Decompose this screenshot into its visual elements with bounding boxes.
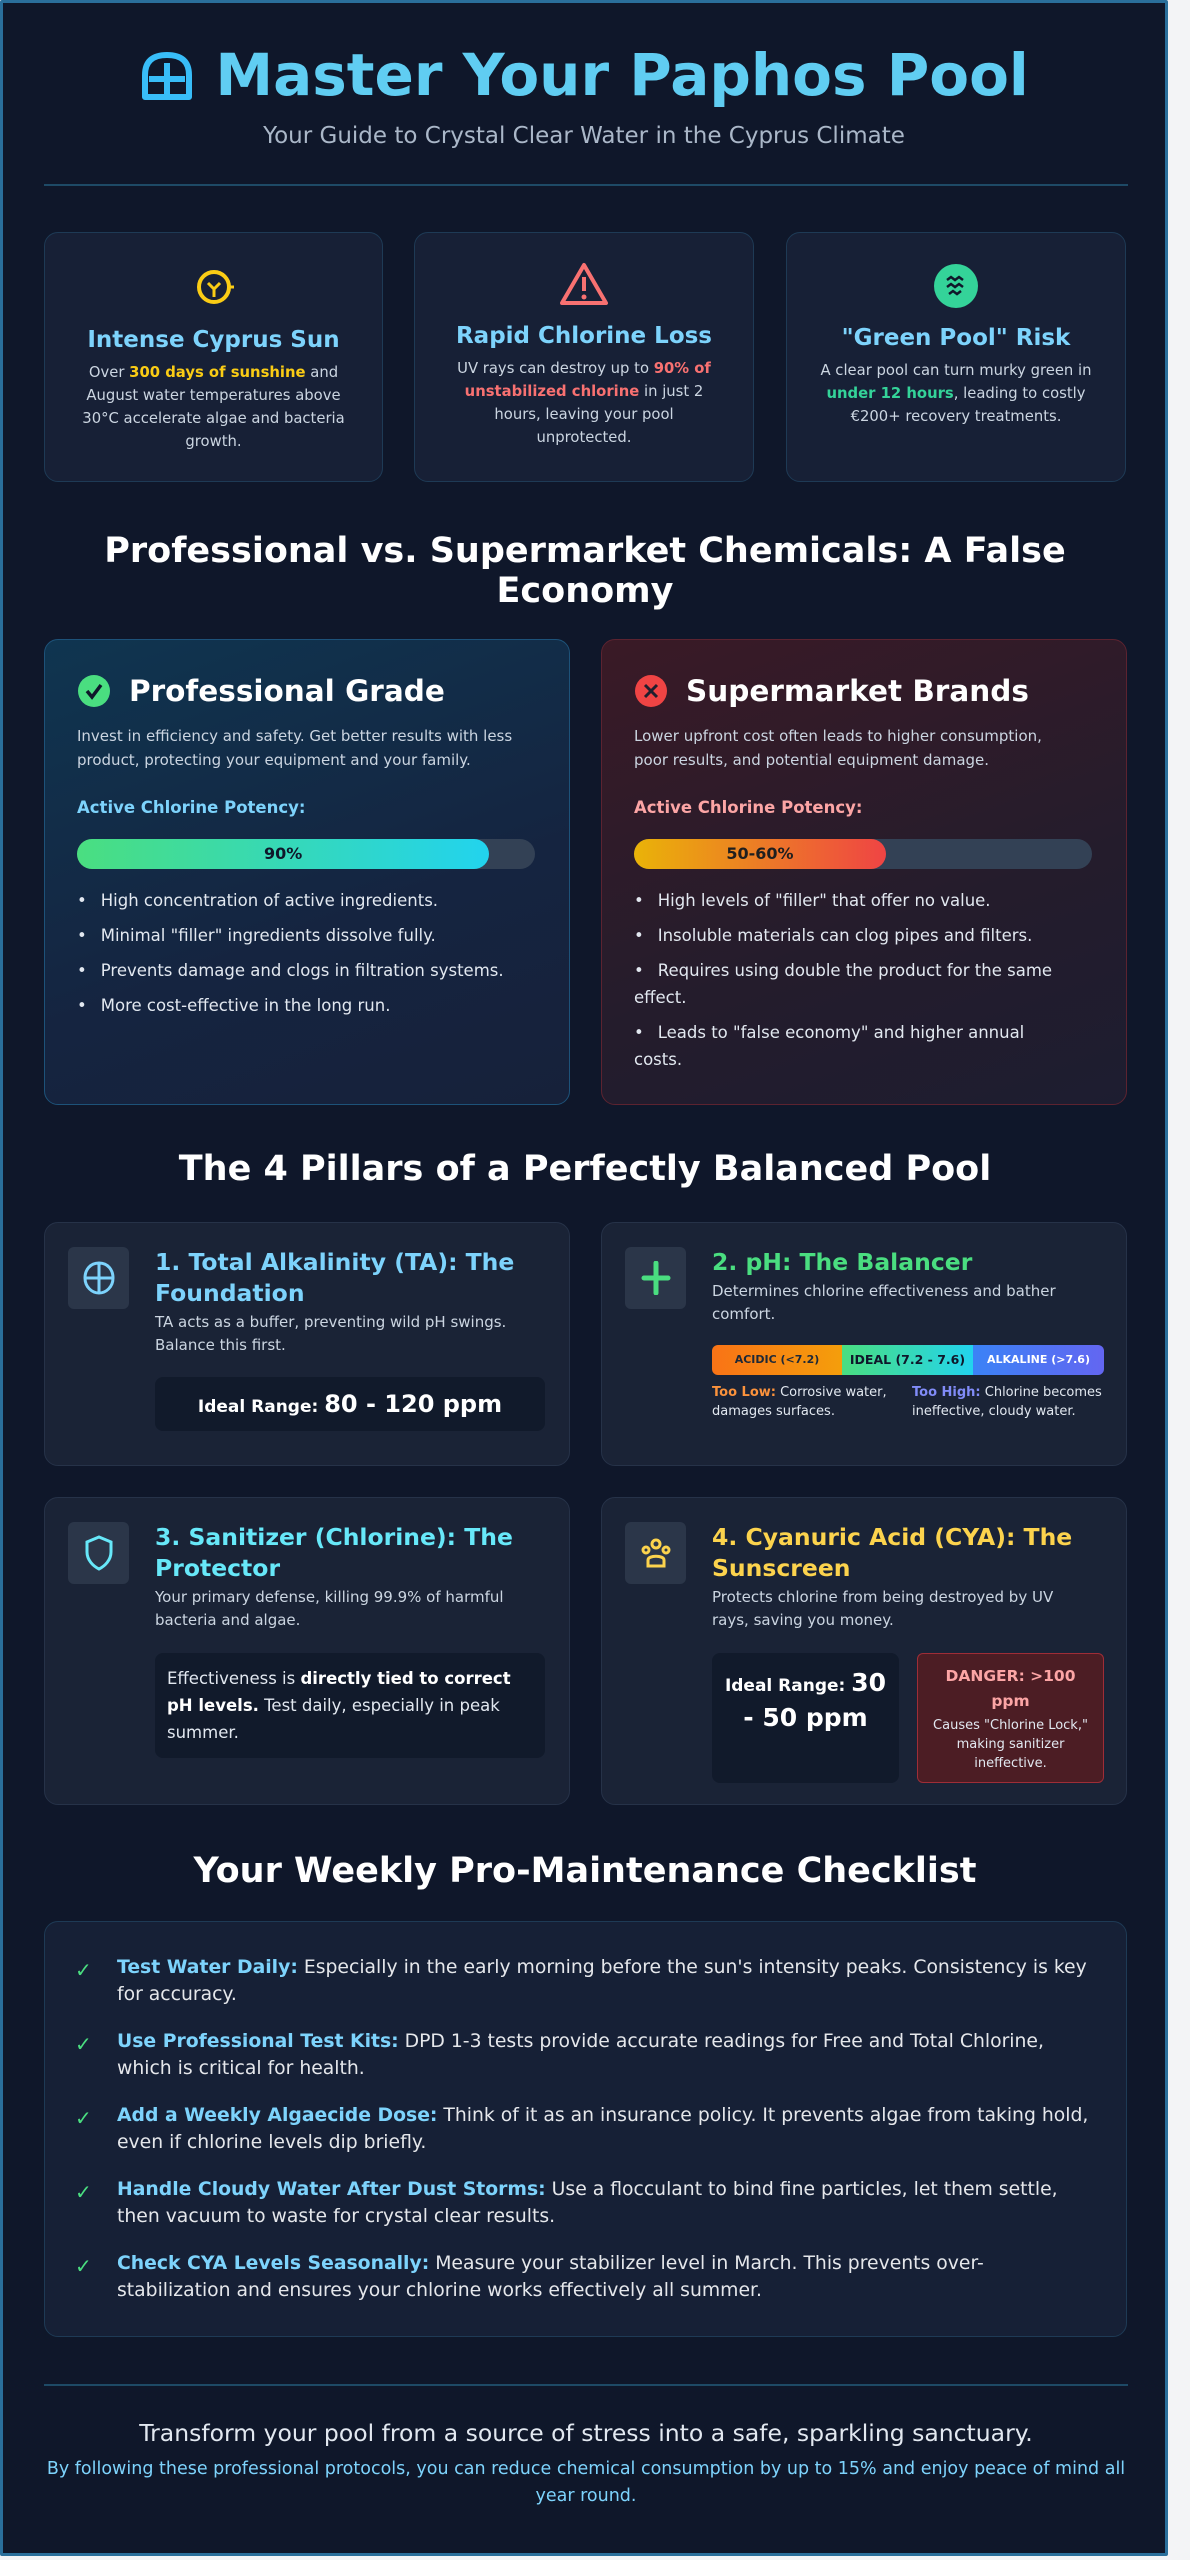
panel: ph: 2. pH: The Balancer: [712, 1248, 972, 1276]
item 3: Add a Weekly Algaecide Dose: Think of it as an insurance policy. It prevents algae from taking hold, even if chlorine levels dip briefly.: [117, 2105, 1088, 2153]
bar: 90%: 90%: [264, 844, 302, 863]
heading: supermarket brands: Supermarket Brands: [686, 674, 1029, 708]
panel: supermarket brands: Lower upfront cost often leads to higher consumption, poor results, and potential equipment damage.: [634, 727, 1042, 769]
heading: professional vs supermarket: Professional vs. Supermarket Chemicals: A False Economy: [104, 531, 1066, 611]
subtitle: Your Guide to Crystal Clear Water in the Cyprus Climate: [263, 123, 905, 149]
panel: ph: [601, 1222, 1127, 1466]
bar: 90%: [77, 839, 535, 869]
panel: cya: Protects chlorine from being destroyed by UV rays, saving you money.: [712, 1588, 1053, 1629]
panel: supermarket brands: Requires using double the product for the same effect.: [634, 961, 1052, 1007]
callout: danger: [917, 1653, 1104, 1783]
footer: tagline: Transform your pool from a source of stress into a safe, sparkling sanctuary.: [139, 2419, 1033, 2447]
callout: danger: Causes "Chlorine Lock," making sanitizer ineffective.: [933, 1718, 1088, 1771]
chart: ph scale: ALKALINE (>7.6): [987, 1353, 1090, 1366]
panel: checklist: [44, 1921, 1127, 2337]
icon: water: [934, 264, 978, 308]
panel: total alkalinity: 1. Total Alkalinity (TA): The Foundation: [155, 1248, 514, 1307]
title: Master Your Paphos Pool: [215, 41, 1029, 109]
callout: effectiveness: Effectiveness is directly tied to correct pH levels. Test daily, especially in peak summer.: [167, 1669, 511, 1742]
panel: supermarket brands: High levels of "filler" that offer no value.: [658, 891, 991, 910]
panel: sanitizer: [44, 1497, 570, 1805]
callout: danger: DANGER: >100 ppm: [945, 1667, 1076, 1710]
panel: professional grade: High concentration of active ingredients.: [101, 891, 438, 910]
icon: ta: [68, 1247, 129, 1309]
footer: note: By following these professional protocols, you can reduce chemical consumption by up to 15% and enjoy peace of mind all year round.: [47, 2459, 1125, 2506]
panel: green pool risk: [786, 232, 1126, 482]
item 1: ✓: [75, 1958, 92, 1982]
panel: professional grade: Invest in efficiency and safety. Get better results with less product, protecting your equipment and your family.: [77, 727, 512, 769]
item 5: ✓: [75, 2254, 92, 2278]
panel: supermarket brands: Insoluble materials can clog pipes and filters.: [658, 926, 1032, 945]
panel: professional grade: More cost-effective in the long run.: [101, 996, 390, 1015]
panel: supermarket brands: Leads to "false economy" and higher annual costs.: [634, 1023, 1024, 1069]
callout: effectiveness: [155, 1653, 545, 1758]
item 2: Use Professional Test Kits: DPD 1-3 tests provide accurate readings for Free and Total Chlorine, which is critical for health.: [117, 2031, 1044, 2079]
panel: rapid chlorine loss: [414, 232, 754, 482]
panel: supermarket brands: [601, 639, 1127, 1105]
item 3: ✓: [75, 2106, 92, 2130]
panel: green pool risk: A clear pool can turn murky green in under 12 hours, leading to costly €200+ recovery treatments.: [820, 362, 1092, 425]
icon: sunscreen: [625, 1522, 686, 1584]
item 5: Check CYA Levels Seasonally: Measure your stabilizer level in March. This prevents over-stabilization and ensures your chlorine works effectively all summer.: [117, 2253, 984, 2301]
panel: intense cyprus sun: Intense Cyprus Sun: [87, 327, 340, 353]
chart: ph scale: ACIDIC (<7.2): [735, 1353, 819, 1366]
panel: total alkalinity: TA acts as a buffer, preventing wild pH swings. Balance this first.: [155, 1313, 506, 1354]
panel: professional grade: Active Chlorine Potency:: [77, 798, 306, 817]
bar: 50-60%: 50-60%: [726, 844, 794, 863]
bar: 50-60%: [634, 839, 1092, 869]
panel: cya: 4. Cyanuric Acid (CYA): The Sunscreen: [712, 1523, 1072, 1582]
callout: ideal range ta: Ideal Range: 80 - 120 ppm: [198, 1390, 502, 1418]
panel: sanitizer: 3. Sanitizer (Chlorine): The Protector: [155, 1523, 513, 1582]
heading: professional grade: Professional Grade: [129, 674, 445, 708]
panel: professional grade: Prevents damage and clogs in filtration systems.: [101, 961, 504, 980]
panel: rapid chlorine loss: UV rays can destroy up to 90% of unstabilized chlorine in just 2 hours, leaving your pool unprotected.: [457, 360, 711, 446]
panel: intense cyprus sun: [44, 232, 383, 482]
panel: sanitizer: Your primary defense, killing 99.9% of harmful bacteria and algae.: [155, 1588, 504, 1629]
panel: ph: Too Low: Corrosive water, damages surfaces.: [712, 1385, 887, 1419]
chart: ph scale: [712, 1345, 1104, 1375]
chart: ph scale: IDEAL (7.2 - 7.6): [850, 1352, 965, 1367]
panel: green pool risk: "Green Pool" Risk: [842, 325, 1070, 351]
item 1: Test Water Daily: Especially in the early morning before the sun's intensity peaks. Consistency is key for accuracy.: [117, 1957, 1087, 2005]
panel: professional grade: [44, 639, 570, 1105]
callout: ideal range ta: [155, 1377, 545, 1431]
item 4: ✓: [75, 2180, 92, 2204]
callout: ideal range cya: [712, 1653, 899, 1783]
item 2: ✓: [75, 2032, 92, 2056]
icon: ph plus: [625, 1247, 686, 1309]
heading: 4 pillars: The 4 Pillars of a Perfectly Balanced Pool: [179, 1149, 991, 1189]
panel: supermarket brands: Active Chlorine Potency:: [634, 798, 862, 817]
item 4: Handle Cloudy Water After Dust Storms: Use a flocculant to bind fine particles, let them settle, then vacuum to waste for crystal clear results.: [117, 2179, 1058, 2227]
panel: ph: Determines chlorine effectiveness and bather comfort.: [712, 1282, 1056, 1323]
panel: cya: [601, 1497, 1127, 1805]
callout: ideal range cya: Ideal Range: 30 - 50 ppm: [725, 1668, 886, 1732]
icon: pool: [142, 52, 192, 100]
panel: total alkalinity: [44, 1222, 570, 1466]
heading: checklist: Your Weekly Pro-Maintenance Checklist: [193, 1851, 976, 1891]
panel: ph: Too High: Chlorine becomes ineffective, cloudy water.: [912, 1385, 1102, 1419]
icon: warning: [560, 262, 608, 305]
panel: intense cyprus sun: Over 300 days of sunshine and August water temperatures above 30°C accelerate algae and bacteria growth.: [82, 364, 345, 450]
panel: rapid chlorine loss: Rapid Chlorine Loss: [456, 323, 712, 349]
panel: professional grade: Minimal "filler" ingredients dissolve fully.: [101, 926, 436, 945]
icon: shield: [68, 1522, 129, 1584]
icon: sun: [197, 270, 234, 304]
